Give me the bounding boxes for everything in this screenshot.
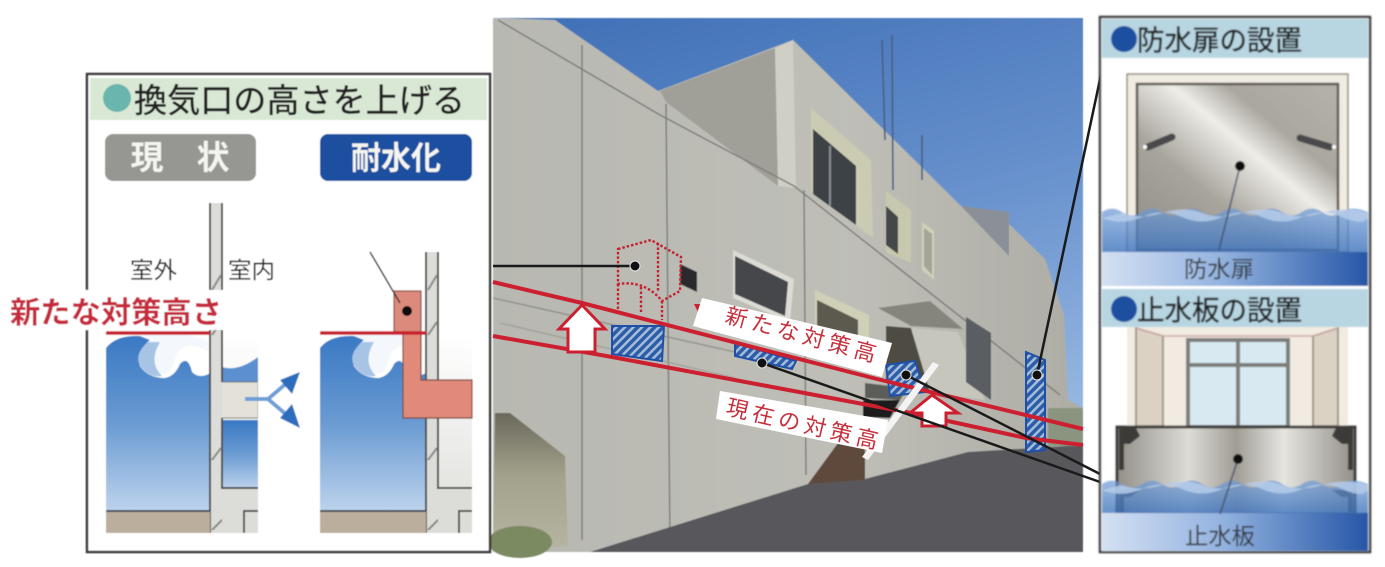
leader dot (1233, 454, 1243, 464)
brown stair (805, 443, 865, 488)
board brackets (1119, 428, 1353, 512)
up arrow right (910, 395, 958, 426)
lower ramp (493, 413, 568, 552)
door levers (1143, 137, 1336, 149)
window (1188, 340, 1288, 427)
red line: left diagram (106, 331, 210, 335)
door leaf (1137, 84, 1338, 250)
outside sea (320, 336, 428, 510)
red line: right diagram (320, 331, 426, 335)
middle right window (815, 290, 869, 350)
water crest (1102, 482, 1368, 494)
hatched flood barrier one (612, 326, 664, 361)
middle left window (733, 250, 794, 322)
building facade behind (1127, 327, 1348, 427)
label: new countermeasure height: 新たな対策高さ (10, 297, 222, 330)
interior flood water (222, 357, 258, 382)
small window one (886, 191, 911, 263)
flood measure markers on photo (493, 70, 1102, 482)
white separator strip (258, 288, 320, 540)
badge: current state: 現 状 (130, 139, 230, 176)
leader line (1220, 459, 1238, 514)
heading bullet (1111, 296, 1137, 322)
panel frame (87, 74, 490, 552)
ground (106, 510, 210, 533)
heading bullet (103, 84, 131, 112)
panel: building photo (488, 18, 1083, 558)
water crest (1102, 210, 1368, 222)
hatched flood barrier three (886, 361, 925, 396)
panel: water stop board (1102, 289, 1368, 551)
upper window (811, 108, 873, 238)
pointer line (370, 252, 400, 303)
pointer dot (402, 306, 412, 316)
diagram: flood-proofed (320, 252, 472, 533)
diagram: current state (106, 203, 258, 533)
heading: 防水扉の設置 (1137, 25, 1302, 56)
far roof block (961, 206, 1009, 256)
shrub (488, 526, 552, 558)
right dark window (966, 317, 991, 400)
antennas (882, 35, 922, 190)
badge: flood-proofed (320, 134, 472, 181)
heading bullet (1111, 26, 1137, 52)
red marker (694, 304, 704, 316)
small window two (922, 222, 934, 280)
flood water (1102, 208, 1368, 252)
upper volume shaded face (660, 48, 778, 186)
wall (210, 203, 258, 533)
board label: 止水板 (1185, 523, 1255, 549)
water stop board (1117, 427, 1355, 514)
wave crest (139, 332, 208, 374)
wave crest (353, 332, 422, 374)
heading band (1102, 19, 1368, 58)
floor block (438, 490, 472, 533)
interior lower water (222, 420, 258, 488)
floor band (1102, 513, 1368, 551)
heading: 止水板の設置 (1137, 295, 1302, 326)
label: new height: 新たな対策高 (723, 303, 879, 367)
arrow: water intrusion (245, 372, 300, 428)
up arrow left (559, 305, 605, 352)
heading band (90, 78, 487, 120)
leader dot (1235, 161, 1245, 171)
red line: new height (493, 282, 1083, 429)
interior background (222, 335, 258, 533)
outdoor label: 室外 (130, 257, 177, 283)
vent duct (212, 382, 258, 418)
heading band (1102, 289, 1368, 327)
entrance canopy (878, 301, 985, 400)
upper volume corner (775, 40, 796, 188)
vent opening (680, 264, 697, 292)
hatched flood barrier two (735, 343, 796, 369)
indoor label: 室内 (228, 257, 275, 283)
leader line (1219, 166, 1240, 250)
door frame (1127, 74, 1348, 252)
white diagonal stair rail (862, 362, 939, 460)
wave swirl (352, 342, 376, 376)
raised vent duct (394, 291, 472, 418)
floor band (1102, 252, 1368, 286)
hatched door barrier (1026, 352, 1045, 452)
badge: current state (105, 134, 256, 181)
door shadow (863, 383, 907, 418)
right column frame (1100, 17, 1370, 552)
flood water (1102, 480, 1368, 513)
dashed raised vent outline (618, 240, 681, 320)
photo sky (493, 18, 1083, 552)
label: new height (693, 298, 892, 377)
floor block (222, 489, 258, 533)
badge: flood-proofed: 耐水化 (351, 140, 441, 176)
ground (320, 510, 426, 533)
building wall (493, 18, 1083, 552)
leader lines (493, 70, 1102, 482)
panel: waterproof door (1100, 17, 1370, 552)
asphalt (590, 445, 1083, 552)
outside sea (106, 336, 212, 510)
red line: current height (493, 336, 1083, 445)
label: current height: 現在の対策高 (724, 395, 881, 454)
wall (426, 252, 472, 533)
wave swirl (138, 342, 162, 376)
heading: 換気口の高さを上げる (134, 82, 465, 119)
interior background (438, 335, 472, 533)
planting right (1048, 408, 1083, 446)
leader dots (630, 261, 1042, 380)
roof parapet lines (493, 20, 1060, 545)
door label: 防水扉 (1184, 256, 1254, 282)
